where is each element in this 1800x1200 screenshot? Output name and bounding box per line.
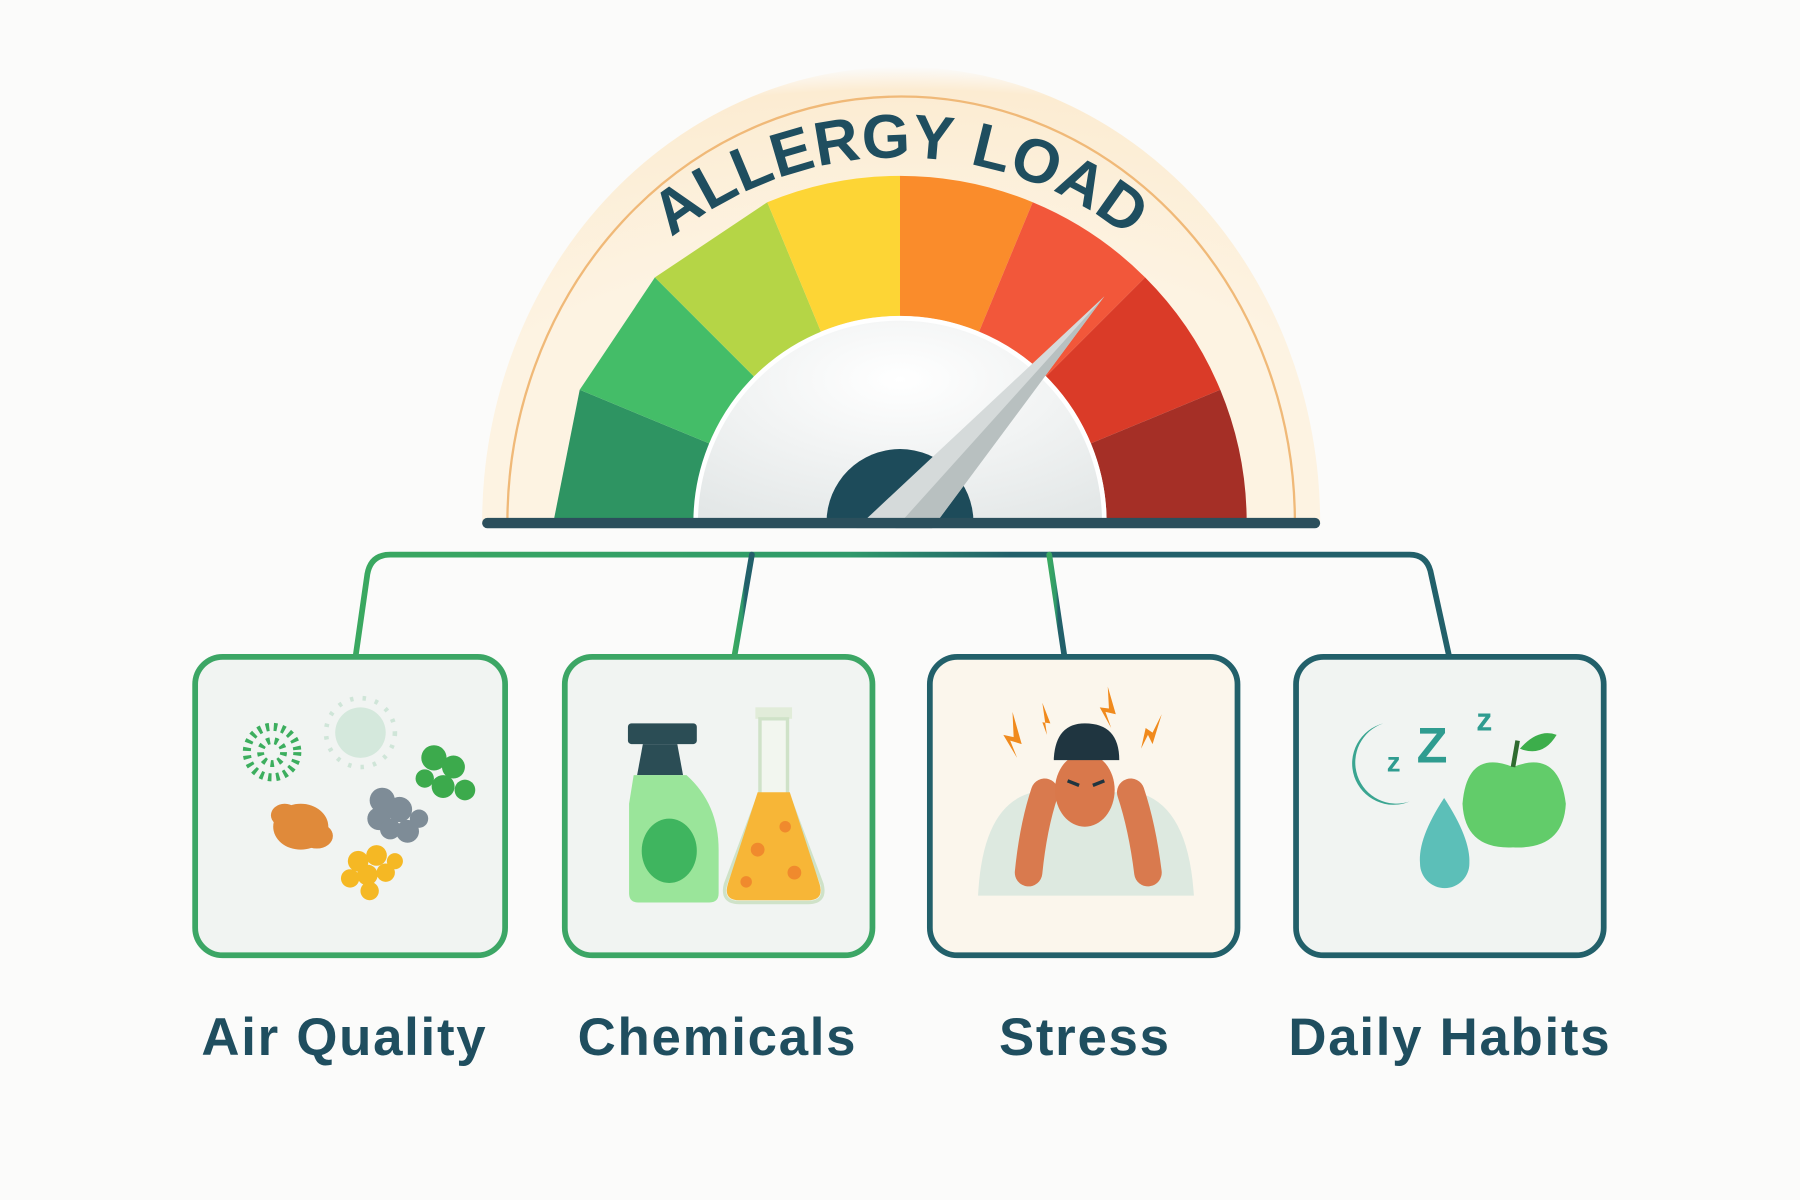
gauge hub [827,449,973,523]
label: Chemicals: Chemicals [578,1008,857,1067]
labels [201,1008,1611,1067]
label: Stress: Stress [999,1008,1171,1067]
connector tree [356,555,1449,655]
needle [856,296,1104,528]
panel: air quality [195,657,505,955]
panel: stress [930,657,1238,955]
icon: allergens [247,698,475,900]
icon: sleep, water, apple: z [1387,747,1401,778]
base bar [482,518,1320,528]
panel: daily habits [1296,657,1604,955]
gauge dial [696,318,1104,523]
label: Daily Habits: Daily Habits [1288,1008,1611,1067]
icon: stressed person [978,687,1194,896]
icon: sleep, water, apple [1352,701,1566,888]
gauge color segments [553,176,1247,523]
title: ALLERGY LOAD: ALLERGY LOAD [660,114,1144,236]
label: Air Quality: Air Quality [201,1008,487,1067]
gauge [482,67,1320,528]
icon: spray bottle and flask [628,707,823,902]
icon: sleep, water, apple: z [1476,701,1492,737]
panel: chemicals [565,657,872,955]
gauge halo [482,67,1320,523]
icon: sleep, water, apple: Z [1417,716,1447,773]
